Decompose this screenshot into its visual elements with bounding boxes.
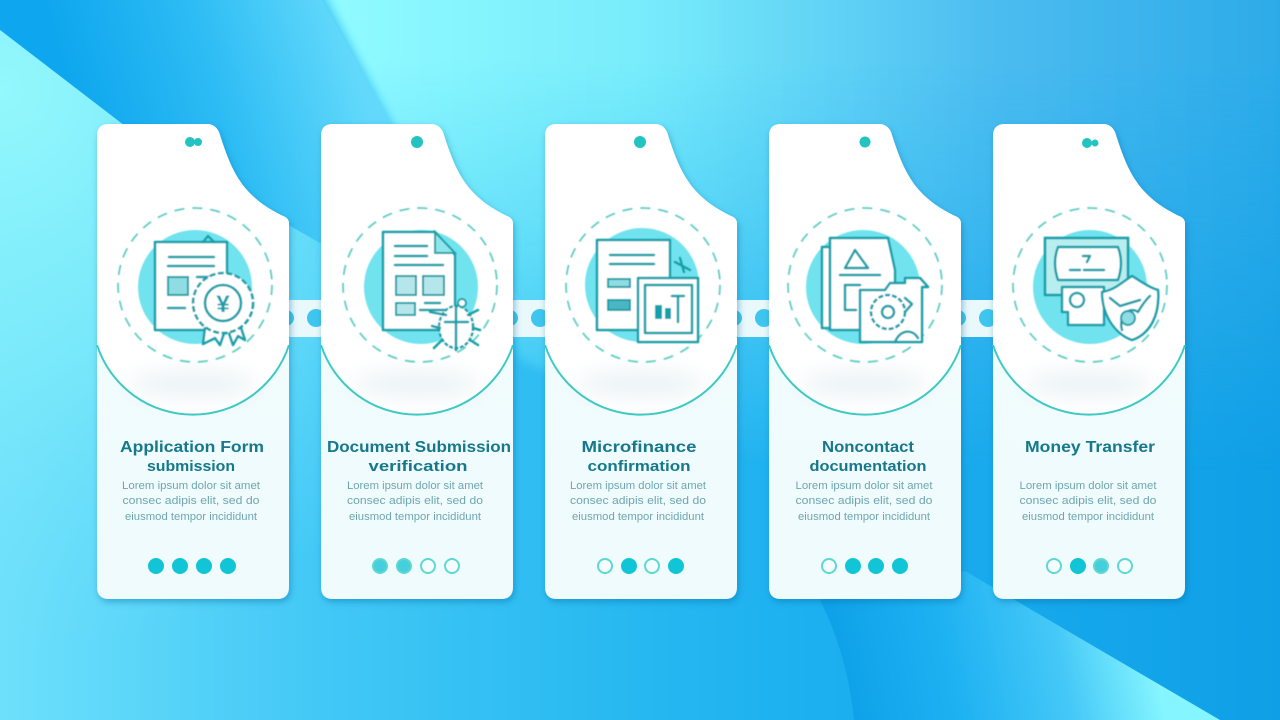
panel: step 5 money transfer (993, 124, 1185, 599)
heading: step 1: Application Form (120, 439, 264, 456)
heading: step 2: Document Submission (327, 439, 511, 456)
text block: step 3 (570, 480, 706, 523)
icon: form with yen seal: ¥ (216, 291, 230, 318)
progress dots: step 4 (822, 558, 908, 574)
text block: step 1: Lorem ipsum dolor sit amet (122, 480, 260, 492)
heading: step 1 second line: submission (147, 458, 235, 475)
panel: step 1 application form (97, 124, 289, 599)
connector bars between the cards (278, 300, 997, 337)
icon: document with bug (343, 208, 497, 362)
text block: step 2 (347, 480, 483, 523)
text block: step 1: consec adipis elit, sed do (122, 495, 260, 507)
heading: step 2 second line: verification (368, 458, 468, 475)
icon: banknote with shield (1013, 208, 1167, 362)
heading: step 4 second line: documentation (810, 458, 926, 475)
text block: step 4: eiusmod tempor incididunt (798, 511, 930, 523)
text block: step 1 (122, 480, 260, 523)
text block: step 2: eiusmod tempor incididunt (349, 511, 481, 523)
text block: step 3: eiusmod tempor incididunt (572, 511, 704, 523)
heading: step 4: Noncontact (822, 439, 915, 456)
text block: step 5: Lorem ipsum dolor sit amet (1020, 480, 1156, 492)
text block: step 3: Lorem ipsum dolor sit amet (570, 480, 706, 492)
text block: step 4: Lorem ipsum dolor sit amet (796, 480, 932, 492)
progress dots: step 3 (598, 558, 684, 574)
progress dots: step 2 (373, 559, 459, 573)
text block: step 2: Lorem ipsum dolor sit amet (347, 480, 483, 492)
text block: step 5: consec adipis elit, sed do (1020, 495, 1156, 507)
text block: step 4 (796, 480, 932, 523)
text block: step 2: consec adipis elit, sed do (347, 495, 483, 507)
heading: step 5: Money Transfer (1025, 439, 1155, 456)
icon: document with framed chart (566, 208, 720, 362)
text block: step 5 (1020, 480, 1156, 523)
progress dots: step 5 (1047, 558, 1132, 574)
panel: step 2 document submission (321, 124, 513, 599)
text block: step 5: eiusmod tempor incididunt (1022, 511, 1154, 523)
panel: step 3 (545, 124, 737, 599)
text block: step 4: consec adipis elit, sed do (796, 495, 932, 507)
icon: form with yen seal (118, 208, 272, 362)
icon: papers with gear (788, 208, 942, 362)
heading: step 3 second line: confirmation (588, 458, 690, 475)
text block: step 1: eiusmod tempor incididunt (125, 511, 257, 523)
panel: step 4 (769, 124, 961, 599)
progress dots: step 1 (148, 558, 236, 574)
text block: step 3: consec adipis elit, sed do (570, 495, 706, 507)
heading: step 3: Microfinance (582, 439, 697, 456)
